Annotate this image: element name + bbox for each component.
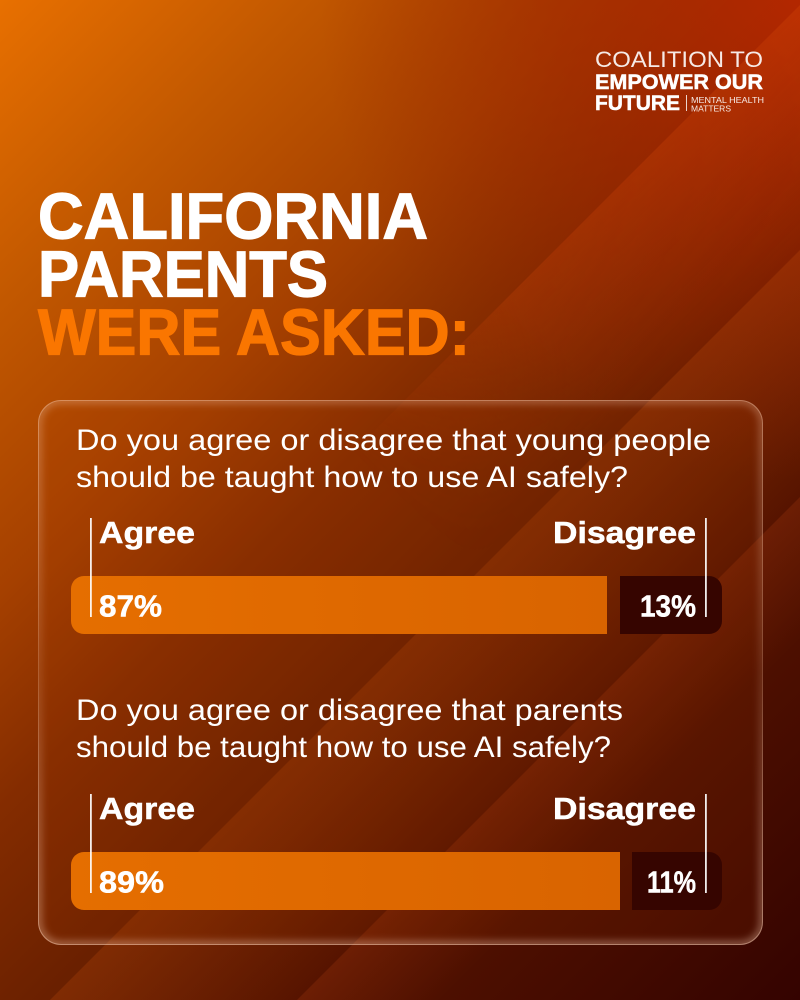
chart: question 1 bar: 87%	[99, 588, 162, 624]
question 1: Do you agree or disagree that young people	[76, 424, 711, 457]
logo: MENTAL HEALTH	[691, 95, 764, 105]
chart: question 2 bar: 89%	[99, 864, 164, 900]
logo: EMPOWER OUR	[595, 71, 763, 94]
chart: question 1 bar: Agree	[99, 515, 195, 550]
question 1: should be taught how to use AI safely?	[76, 461, 628, 494]
question 2	[76, 694, 623, 764]
title: WERE ASKED:	[38, 296, 470, 368]
chart: question 2 bar	[71, 791, 722, 910]
logo: MATTERS	[691, 104, 731, 114]
chart: question 2 bar: Agree	[99, 791, 195, 826]
title: PARENTS	[38, 238, 328, 310]
chart: question 2 bar: Disagree	[553, 791, 696, 826]
question 2: should be taught how to use AI safely?	[76, 731, 611, 764]
chart: question 1 bar: Disagree	[553, 515, 696, 550]
question 2: Do you agree or disagree that parents	[76, 694, 623, 727]
chart: question 1 bar: 13%	[640, 588, 696, 624]
title	[38, 180, 470, 368]
question 1	[76, 424, 711, 494]
logo: COALITION TO	[595, 47, 763, 72]
title: CALIFORNIA	[38, 180, 428, 252]
chart: question 2 bar: 11%	[647, 864, 696, 900]
logo	[595, 47, 764, 115]
chart: question 1 bar	[71, 515, 722, 634]
panel: survey card	[38, 400, 763, 945]
logo: FUTURE	[595, 92, 680, 115]
